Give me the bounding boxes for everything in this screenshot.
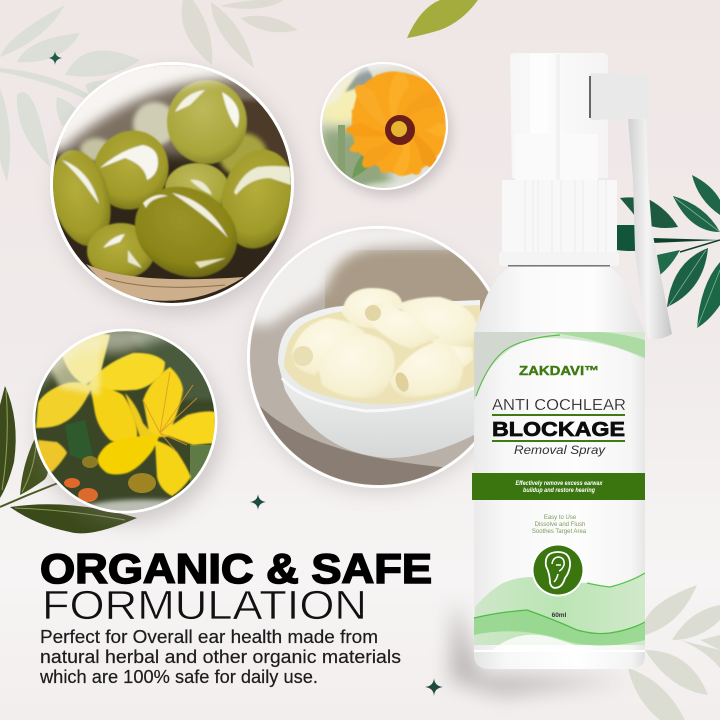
description: which are 100% safe for daily use.	[39, 667, 318, 687]
benefit list: Soothes Target Area	[532, 529, 587, 535]
olive: left	[53, 150, 112, 247]
description	[39, 627, 401, 687]
top glass fade	[56, 65, 241, 160]
olive: bottom left	[87, 223, 155, 279]
faded leaves: top centre	[182, 0, 298, 68]
photo circle: olives	[42, 55, 305, 314]
leaves: right side dark green	[617, 175, 720, 328]
olive: top	[167, 80, 247, 164]
description: Perfect for Overall ear health made from	[40, 627, 378, 647]
olive: upper left	[94, 130, 170, 210]
nozzle head	[589, 73, 649, 120]
orange buds	[64, 456, 156, 502]
photo circle: yellow flowers	[32, 326, 222, 523]
bottle body	[472, 267, 645, 670]
spray tube	[628, 119, 672, 339]
green band: Effectively remove excess earwax	[516, 481, 603, 487]
benefit list: Easy to Use	[544, 515, 577, 521]
olive: right	[221, 149, 291, 250]
olive: mid	[164, 162, 228, 205]
product: spray bottle	[450, 53, 672, 695]
flower right	[98, 367, 215, 496]
product name: BLOCKAGE	[492, 419, 625, 441]
garlic bowl	[278, 300, 480, 458]
product name: ANTI COCHLEAR	[492, 397, 626, 414]
sparkle: bottom	[425, 678, 443, 696]
sparkle: centre	[250, 494, 266, 510]
heading: FORMULATION	[42, 582, 367, 628]
wooden bowl rim	[86, 264, 244, 301]
icon: ear	[532, 544, 584, 596]
garlic cloves	[292, 288, 477, 398]
photo circle: orange flower	[316, 58, 451, 198]
flower left	[35, 333, 165, 472]
green band	[472, 473, 645, 500]
olive: front large	[134, 186, 238, 278]
bottle shadow	[450, 600, 630, 695]
benefit list	[532, 515, 587, 535]
leaves: left side olive dark	[0, 386, 137, 533]
leaf: top right gold green	[407, 0, 478, 38]
label	[474, 332, 645, 670]
flower centre	[385, 115, 415, 145]
transparent over-cap	[510, 53, 608, 180]
volume: 60ml	[552, 612, 567, 619]
faded leaves: bottom right	[628, 585, 720, 720]
bottom green waves	[474, 573, 645, 652]
top green waves	[474, 332, 645, 400]
green leaf	[352, 155, 368, 178]
product name: Removal Spray	[514, 443, 606, 457]
description: natural herbal and other organic materials	[40, 647, 401, 667]
ribbed collar	[499, 180, 619, 266]
orange petals	[346, 71, 450, 178]
benefit list: Dissolve and Flush	[535, 522, 585, 528]
green band: buildup and restore hearing	[523, 488, 595, 494]
heading	[40, 545, 432, 628]
faded leaves: top left	[0, 5, 140, 182]
heading: ORGANIC & SAFE	[40, 545, 432, 592]
sparkle: top left	[49, 51, 62, 65]
brand: ZAKDAVI™	[519, 363, 599, 378]
photo circle: garlic	[245, 222, 515, 495]
product name	[492, 397, 626, 457]
